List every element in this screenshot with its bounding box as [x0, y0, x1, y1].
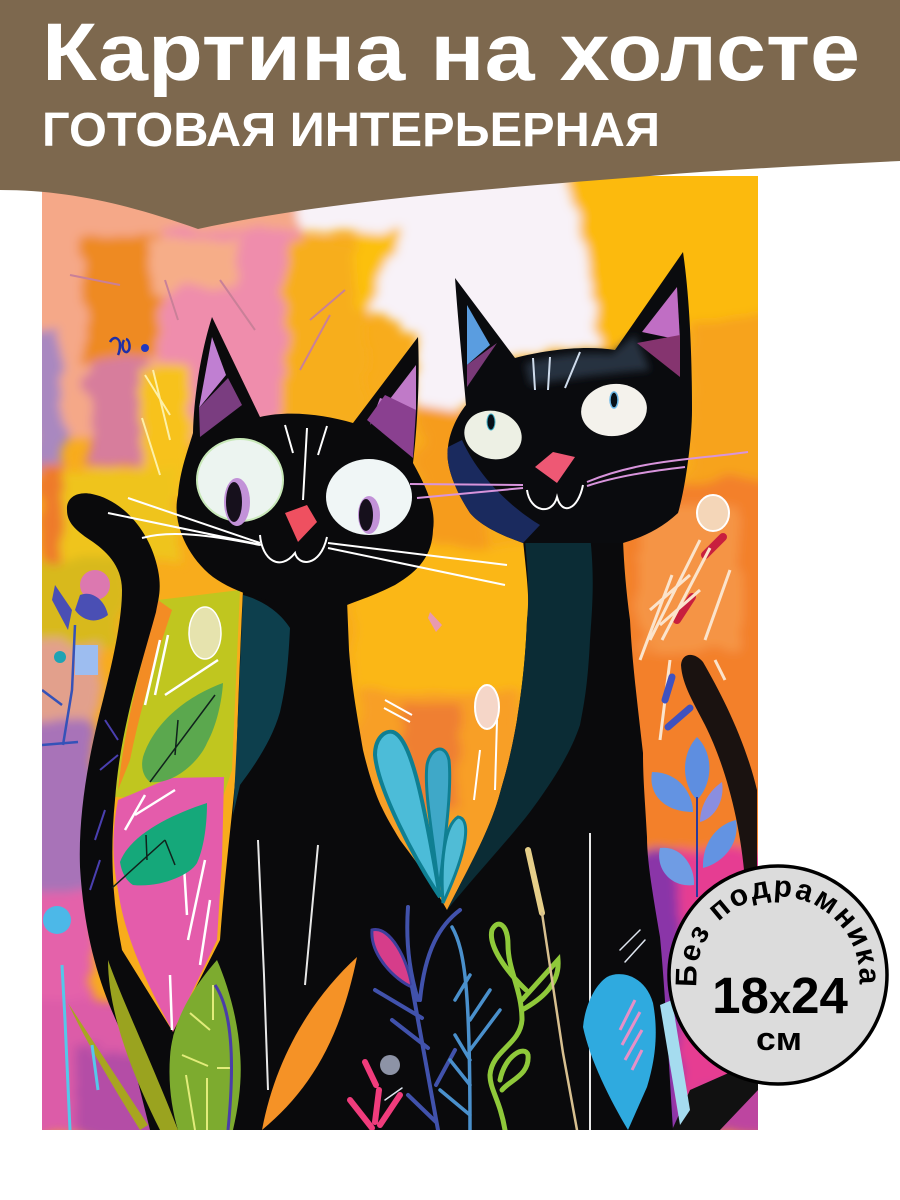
left ear lower: [199, 378, 242, 437]
nose: [285, 505, 317, 542]
orange strip: [118, 600, 172, 790]
left ear lower: [467, 343, 497, 387]
reed stem: [542, 913, 577, 1130]
right pupil: [358, 496, 380, 534]
blue circle: [43, 906, 71, 934]
mouth: [260, 535, 327, 562]
blue dabs: [665, 677, 690, 727]
blade: [108, 960, 178, 1130]
white strokes: [384, 700, 497, 800]
yellow-green patch: [115, 590, 240, 800]
forehead marks: [533, 352, 580, 390]
reed head: [528, 850, 542, 913]
thin blade: [68, 1003, 148, 1130]
painting: two black cats: [20, 160, 780, 1140]
blue bloom: [52, 585, 108, 630]
left patch details: [68, 607, 357, 1130]
leaf lower left: [659, 848, 694, 885]
right details: [640, 495, 737, 897]
pink mark: [428, 612, 442, 632]
green leaf: [142, 683, 223, 782]
red dabs: [677, 537, 723, 620]
peach blob: [697, 495, 729, 531]
white mark: [385, 930, 645, 1100]
left flowers: [42, 570, 118, 1130]
nose: [535, 452, 575, 483]
title: Картина на холсте: [42, 7, 860, 98]
cyan drip: [62, 965, 98, 1130]
right ear lower: [367, 395, 416, 458]
leaf marks: [182, 985, 230, 1130]
badge size: 18x24: [712, 967, 848, 1024]
left pupil: [487, 414, 495, 430]
pink bloom: [80, 570, 110, 600]
centre details: [375, 612, 499, 903]
yellow strokes: [142, 370, 170, 475]
pale strip: [660, 1000, 690, 1125]
light fern: [440, 927, 500, 1130]
stem: [696, 797, 698, 897]
white squiggles: [640, 540, 730, 740]
dark fern: [375, 907, 460, 1130]
subtitle: ГОТОВАЯ ИНТЕРЬЕРНАЯ: [42, 104, 660, 157]
head blue shading: [447, 440, 540, 543]
oval: [189, 607, 221, 659]
green vine: [490, 924, 558, 1130]
left eye: [464, 410, 522, 460]
teal blob: [54, 651, 66, 663]
left pupil core: [226, 482, 242, 522]
pink patch: [114, 777, 224, 1032]
mouth: [527, 485, 583, 509]
leaf right: [700, 782, 723, 822]
left ear inner: [199, 337, 226, 408]
left leaf: [375, 732, 440, 897]
purple brush marks: [70, 275, 345, 370]
left eye: [197, 439, 283, 521]
gray dot: [380, 1055, 400, 1075]
right eye: [581, 384, 647, 436]
right ear inner: [370, 365, 416, 425]
left cat tail: [67, 493, 178, 1130]
purple bud: [372, 930, 412, 987]
badge unit: см: [756, 1021, 802, 1057]
tail marks: [90, 720, 118, 890]
leaf top: [685, 737, 709, 800]
cats bodies: [173, 540, 673, 1130]
painted background: [20, 160, 780, 1140]
white strokes: [125, 635, 218, 1030]
right leaf: [442, 817, 466, 903]
left cat head: [108, 317, 507, 606]
whiskers: [108, 498, 507, 585]
right eye: [326, 459, 412, 535]
leaf stem: [215, 985, 232, 1130]
forehead marks: [285, 425, 327, 500]
left cat teal shading: [233, 595, 290, 815]
right ear inner: [642, 287, 680, 340]
right tail end below badge: [672, 1074, 758, 1130]
leaf left: [651, 772, 693, 812]
blue marks: [110, 338, 149, 355]
bottom plants: [350, 850, 645, 1130]
teal leaf: [120, 803, 207, 885]
header banner: [0, 0, 900, 229]
blue bottom right leaf: [583, 974, 656, 1130]
right cat tail: [681, 655, 757, 880]
middle leaf: [426, 749, 450, 890]
leaf lower right: [703, 820, 737, 868]
right pupil core: [359, 499, 373, 531]
blue dot: [141, 344, 149, 352]
pink flower: [350, 1062, 400, 1128]
badge curved text: Без подрамника: [676, 880, 876, 986]
whiskers: [410, 452, 748, 498]
left ear inner: [467, 305, 490, 365]
white tulip: [475, 685, 499, 729]
left pupil: [224, 478, 250, 526]
body strokes: [258, 833, 590, 1130]
badge: without stretcher, 18x24 cm: [667, 864, 889, 1086]
pale square: [75, 645, 98, 675]
right pupil: [610, 392, 618, 408]
right cat teal shading: [447, 514, 593, 910]
right ear lower: [637, 335, 680, 377]
right cat head: [410, 252, 748, 543]
pink stripes: [620, 1000, 642, 1070]
leaf veins: [112, 695, 215, 888]
bottom leaf: [169, 960, 241, 1130]
orange blade: [262, 957, 357, 1130]
forehead highlight: [525, 335, 650, 385]
stem: [42, 625, 78, 745]
